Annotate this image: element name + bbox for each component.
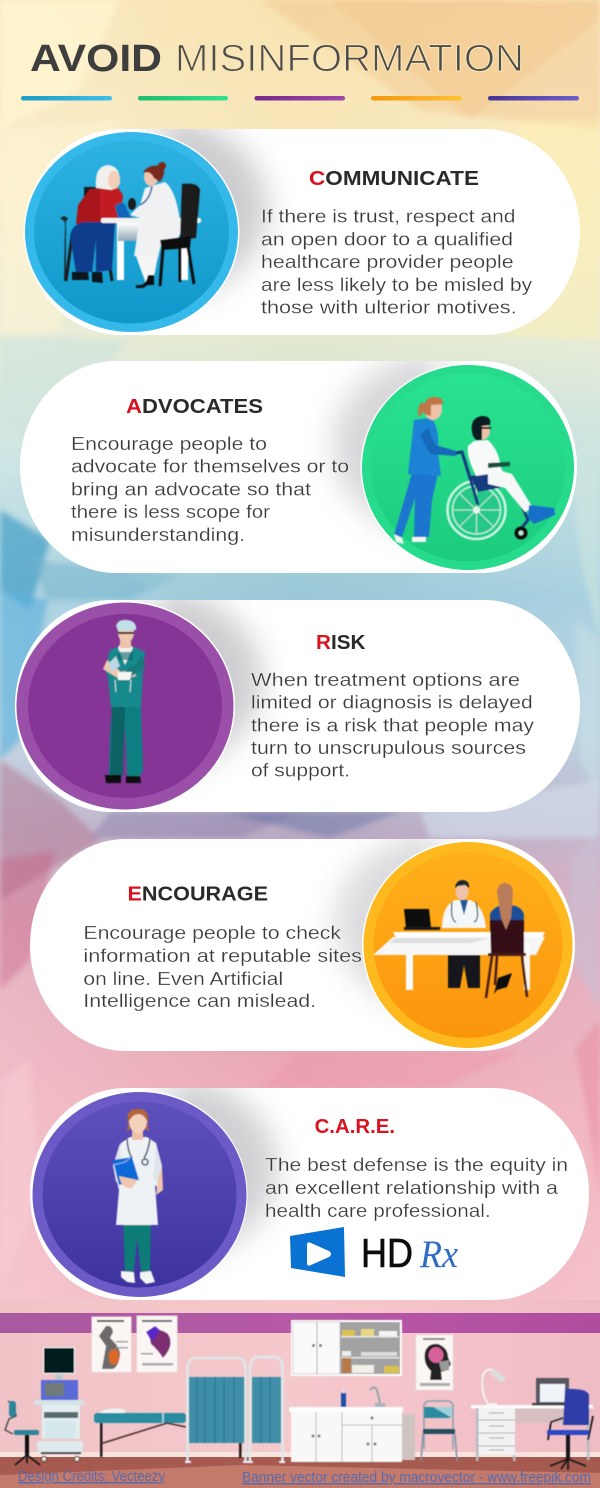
side chair	[421, 1401, 457, 1461]
heading: c.a.r.e.: C.A.R.E.	[315, 1115, 395, 1138]
text block: c.a.r.e.	[265, 1154, 568, 1221]
exam bed	[94, 1408, 242, 1458]
text block: advocates: misunderstanding.	[71, 524, 245, 545]
wall cabinet	[291, 1320, 402, 1376]
text block: risk: of support.	[251, 760, 350, 781]
icon: nurse pushing patient in wheelchair	[360, 364, 576, 572]
heading: advocates: ADVOCATES	[126, 395, 263, 418]
icon: doctor with clipboard	[32, 1090, 248, 1298]
text block: communicate: If there is trust, respect and	[261, 206, 516, 227]
text block: risk: turn to unscrupulous sources	[251, 737, 526, 758]
poster: head anatomy	[416, 1335, 453, 1390]
logo: HD Rx: HD	[361, 1230, 413, 1276]
poster: heart	[137, 1316, 177, 1372]
icon: doctor taking blood pressure of elderly patient	[24, 130, 240, 334]
panel: advocates	[20, 353, 577, 573]
heading: encourage: ENCOURAGE	[128, 883, 268, 906]
text block: encourage: information at reputable sites	[83, 945, 362, 966]
text block: advocates: advocate for themselves or to	[71, 456, 349, 477]
privacy screen	[185, 1357, 285, 1463]
text block: advocates	[71, 433, 349, 545]
banner: clinic room	[0, 1300, 600, 1488]
desk with lamp and laptop	[471, 1368, 593, 1470]
text block: advocates: there is less scope for	[71, 501, 270, 522]
text block: advocates: bring an advocate so that	[71, 479, 311, 500]
heading: communicate: COMMUNICATE	[309, 167, 479, 190]
logo: HD Rx: Rx	[419, 1233, 459, 1276]
panel: risk	[15, 588, 580, 812]
purple band	[0, 1313, 600, 1333]
credit: design: Design Credits: Vecteezy	[18, 1469, 166, 1485]
sink cabinet	[289, 1388, 415, 1462]
text block: risk: there is a risk that people may	[251, 715, 535, 736]
panel: encourage	[30, 832, 575, 1051]
panel: communicate	[24, 116, 580, 335]
text block: c.a.r.e.: an excellent relationship with a	[265, 1177, 559, 1198]
ultrasound machine	[34, 1347, 84, 1462]
text block: communicate: an open door to a qualified	[261, 229, 513, 250]
text block: c.a.r.e.: health care professional.	[265, 1200, 491, 1221]
colour divider bars	[21, 96, 579, 100]
text block: communicate: healthcare provider people	[261, 251, 514, 272]
text block: risk: When treatment options are	[251, 669, 520, 690]
text block: c.a.r.e.: The best defense is the equity in	[265, 1154, 568, 1175]
text block: communicate	[261, 206, 533, 317]
text block: encourage: Intelligence can mislead.	[83, 990, 316, 1011]
text block: encourage: on line. Even Artificial	[83, 968, 283, 989]
icon: doctor consulting patient at desk	[362, 840, 574, 1050]
text block: encourage: Encourage people to check	[83, 922, 342, 943]
text block: risk	[251, 669, 535, 781]
wall	[0, 1300, 600, 1453]
text block: communicate: are less likely to be misled by	[261, 274, 533, 295]
stool	[5, 1401, 40, 1465]
text block: encourage	[83, 922, 362, 1011]
credit: banner vector: Banner vector created by macrovector - www.freepik.com	[242, 1470, 591, 1486]
title: MISINFORMATION	[175, 38, 524, 80]
poster: pregnancy	[92, 1317, 131, 1372]
panel: c.a.r.e.	[30, 1076, 589, 1300]
logo: HD Rx	[290, 1227, 459, 1277]
icon: surgeon with crossed arms	[15, 601, 235, 811]
heading: risk: RISK	[316, 631, 366, 654]
title: AVOID	[30, 38, 162, 80]
baseboard and floor	[0, 1452, 600, 1488]
text block: risk: limited or diagnosis is delayed	[251, 692, 533, 713]
text block: communicate: those with ulterior motives.	[261, 296, 517, 317]
text block: advocates: Encourage people to	[71, 433, 267, 454]
title	[30, 38, 524, 80]
